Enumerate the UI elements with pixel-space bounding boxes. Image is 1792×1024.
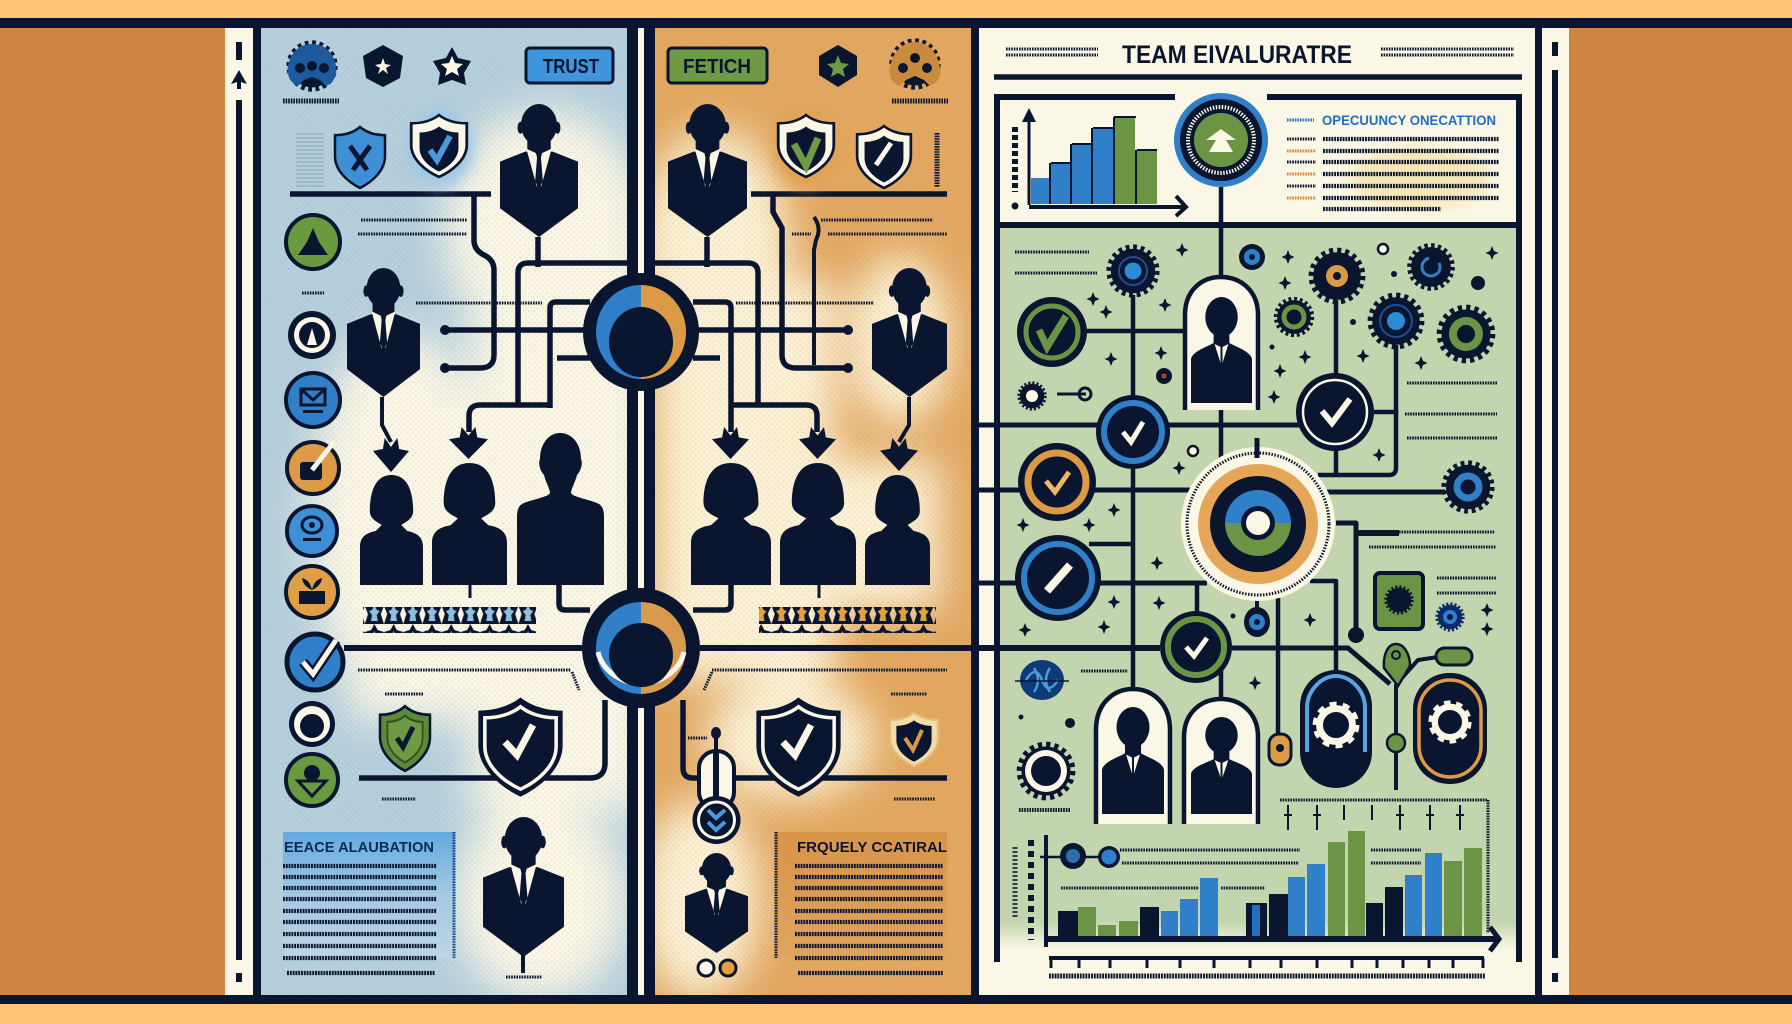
legend nodes bbox=[1040, 843, 1120, 869]
shield: dark with blue check bbox=[407, 110, 473, 186]
bar chart: performance bbox=[1015, 831, 1499, 951]
title side dashes bbox=[994, 49, 1522, 77]
icon: green gear tile bbox=[1375, 573, 1423, 629]
person: mid left manager bbox=[347, 268, 420, 397]
gear: green ring bbox=[1439, 307, 1493, 361]
gear: small white core bbox=[1019, 383, 1045, 409]
green connector network bbox=[979, 187, 1445, 790]
emblem: blue paw bbox=[283, 43, 339, 101]
shield: green check bbox=[380, 706, 430, 771]
icon: blue emblem bbox=[1015, 660, 1069, 700]
axes bbox=[1015, 835, 1499, 951]
indicator dots bbox=[698, 960, 736, 976]
bars bbox=[1058, 831, 1482, 937]
status: blue check circle bbox=[1096, 395, 1170, 469]
icon: green circle bbox=[286, 215, 340, 269]
icon: green person pin bbox=[286, 754, 338, 806]
icon: white ring bbox=[289, 701, 335, 747]
hub: upper centre ring bbox=[583, 273, 699, 391]
team silhouettes: left bbox=[360, 433, 604, 585]
gear: small green bbox=[1276, 299, 1312, 335]
gear: blue swirl bbox=[1409, 245, 1453, 289]
left margin strip bbox=[225, 28, 253, 995]
text lines: right upper labels bbox=[736, 133, 947, 303]
title: TEAM EIVALURATRE bbox=[1122, 41, 1352, 69]
icon: blue eye bbox=[287, 506, 337, 556]
gauge badge: blue and green bbox=[1174, 93, 1268, 187]
button: fetich bbox=[668, 48, 767, 83]
timeline axis bbox=[1049, 958, 1485, 976]
shield: big left check bbox=[478, 697, 563, 797]
right margin strip bbox=[1542, 28, 1569, 995]
panel: evaluation background bbox=[979, 28, 1535, 995]
icon: white star badge bbox=[433, 47, 471, 85]
capsule: orange gear pod bbox=[1413, 673, 1487, 784]
icon: green valve bbox=[1384, 644, 1472, 752]
icon: green star badge bbox=[819, 45, 857, 87]
button: fetich: FETICH bbox=[683, 56, 751, 78]
icon: blue check bbox=[287, 634, 343, 690]
callout: left text box: EEACE ALAUBATION bbox=[284, 839, 434, 856]
small bar chart bbox=[1012, 108, 1186, 216]
gear: blue core bbox=[1109, 247, 1157, 295]
gear: blue ring right bbox=[1444, 463, 1492, 511]
antenna connector badge bbox=[692, 727, 740, 844]
status: white ring check circle bbox=[1296, 373, 1374, 451]
callout: right text box: FRQUELY CCATIRAL bbox=[797, 839, 947, 856]
shield: small right gold bbox=[890, 713, 938, 766]
gear: small blue lower bbox=[1437, 604, 1463, 630]
hub: lower centre ring bbox=[582, 588, 700, 708]
panel: blue trust background bbox=[261, 28, 650, 1000]
connector network: left and centre bbox=[290, 194, 1160, 778]
shield: blue with mark bbox=[335, 127, 385, 188]
status: green check circle bbox=[1017, 297, 1087, 367]
icon: small blue node lower bbox=[1244, 607, 1270, 637]
icon: orange pencil bbox=[287, 442, 339, 494]
central target gauge bbox=[1181, 438, 1335, 601]
button: trust bbox=[526, 48, 613, 83]
person: top left leader bbox=[500, 104, 578, 237]
status: orange check circle bbox=[1018, 443, 1096, 521]
tick row above chart bbox=[1280, 800, 1488, 933]
person card: lower left arch bbox=[1096, 689, 1170, 824]
arrows: down to team members bbox=[373, 427, 918, 472]
capsule: orange lock bbox=[1269, 734, 1291, 765]
icon: small blue node bbox=[1239, 244, 1265, 270]
icon: key connector bbox=[1057, 388, 1091, 400]
person: bottom left bbox=[483, 817, 564, 973]
capsule: blue gear pod bbox=[1300, 670, 1372, 788]
rating stars: blue bbox=[363, 607, 536, 633]
status: blue slash circle bbox=[1015, 535, 1101, 621]
person: mid right manager bbox=[872, 268, 947, 397]
text lines: green panel labels bbox=[1015, 252, 1497, 810]
frame: evaluation panels bbox=[994, 94, 1522, 962]
person: bottom centre bbox=[685, 853, 748, 953]
gears: upper cluster bbox=[1019, 245, 1493, 630]
callout: left text box bbox=[283, 832, 455, 973]
person card: top arch bbox=[1185, 277, 1258, 410]
icon: white cog bbox=[1019, 744, 1073, 798]
status: green check small bbox=[1160, 611, 1232, 683]
icon: dark star badge bbox=[363, 45, 403, 87]
gear: blue core large bbox=[1370, 295, 1422, 347]
text lines: lower labels bbox=[358, 670, 947, 977]
legend text lines bbox=[1061, 850, 1421, 888]
gear: orange core bbox=[1311, 250, 1363, 302]
button: trust: TRUST bbox=[543, 56, 599, 78]
icon: blue envelope bbox=[286, 373, 340, 427]
text lines: left upper labels bbox=[302, 133, 542, 303]
icon: white ring keyhole bbox=[288, 311, 336, 359]
left icon column bbox=[286, 215, 343, 806]
rating stars: orange bbox=[759, 607, 936, 633]
shield: dark with green check bbox=[773, 110, 839, 186]
panel: orange fetich background bbox=[640, 28, 971, 1000]
text block: occupancy lines bbox=[1287, 139, 1499, 209]
emblem: orange paw bbox=[890, 41, 948, 101]
sparkles and dots bbox=[1016, 243, 1498, 728]
person card: lower right arch bbox=[1184, 699, 1258, 824]
heading: occupancy: OPECUUNCY ONECATTION bbox=[1322, 112, 1496, 128]
person: top right leader bbox=[668, 104, 747, 237]
icon: orange sprout bbox=[286, 566, 338, 618]
callout: right text box bbox=[775, 832, 947, 973]
shield: big right check bbox=[756, 697, 841, 797]
team silhouettes: right bbox=[691, 463, 930, 585]
shield: dark with white slash bbox=[857, 126, 911, 188]
